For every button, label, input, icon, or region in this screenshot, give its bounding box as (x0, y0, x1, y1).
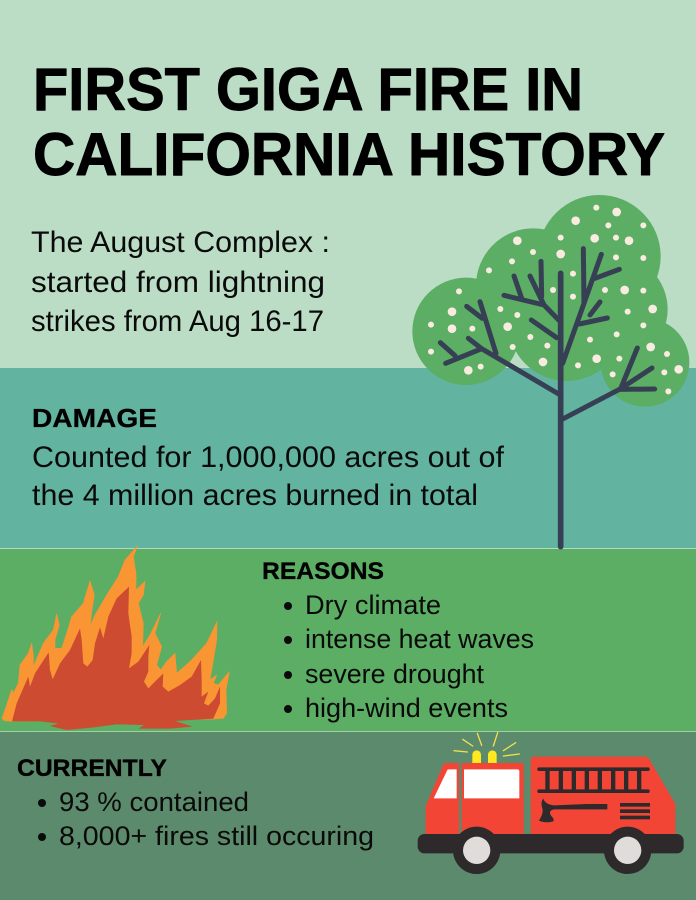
panel: currently background (0, 731, 696, 900)
text block: intro (31, 226, 330, 338)
heading: reasons: REASONS (262, 558, 384, 585)
list: currently (38, 787, 374, 851)
title: CALIFORNIA HISTORY (33, 121, 665, 188)
list: currently: 8,000+ fires still occuring (59, 821, 374, 851)
text block: damage: Counted for 1,000,000 acres out of (32, 441, 505, 474)
text block: damage (32, 441, 505, 512)
list: currently: 93 % contained (59, 787, 249, 817)
panel: reasons background (0, 548, 696, 731)
list: reasons: severe drought (305, 659, 484, 689)
text block: intro: The August Complex : (31, 226, 330, 259)
icon: fire truck (418, 733, 684, 874)
title: FIRST GIGA FIRE IN (33, 56, 583, 123)
heading: currently: CURRENTLY (17, 755, 167, 782)
panel: damage background (0, 368, 696, 548)
title (33, 56, 665, 188)
list: reasons (284, 590, 534, 723)
list: reasons: Dry climate (305, 590, 441, 620)
text block: intro: strikes from Aug 16-17 (31, 305, 324, 338)
heading: damage: DAMAGE (32, 403, 157, 433)
icon: flame (2, 546, 229, 730)
list: reasons: high-wind events (305, 693, 508, 723)
list: reasons: intense heat waves (305, 624, 534, 654)
icon: tree (412, 195, 689, 547)
text block: intro: started from lightning (31, 266, 325, 299)
text block: damage: the 4 million acres burned in total (32, 479, 478, 512)
panel: header background (0, 0, 696, 368)
